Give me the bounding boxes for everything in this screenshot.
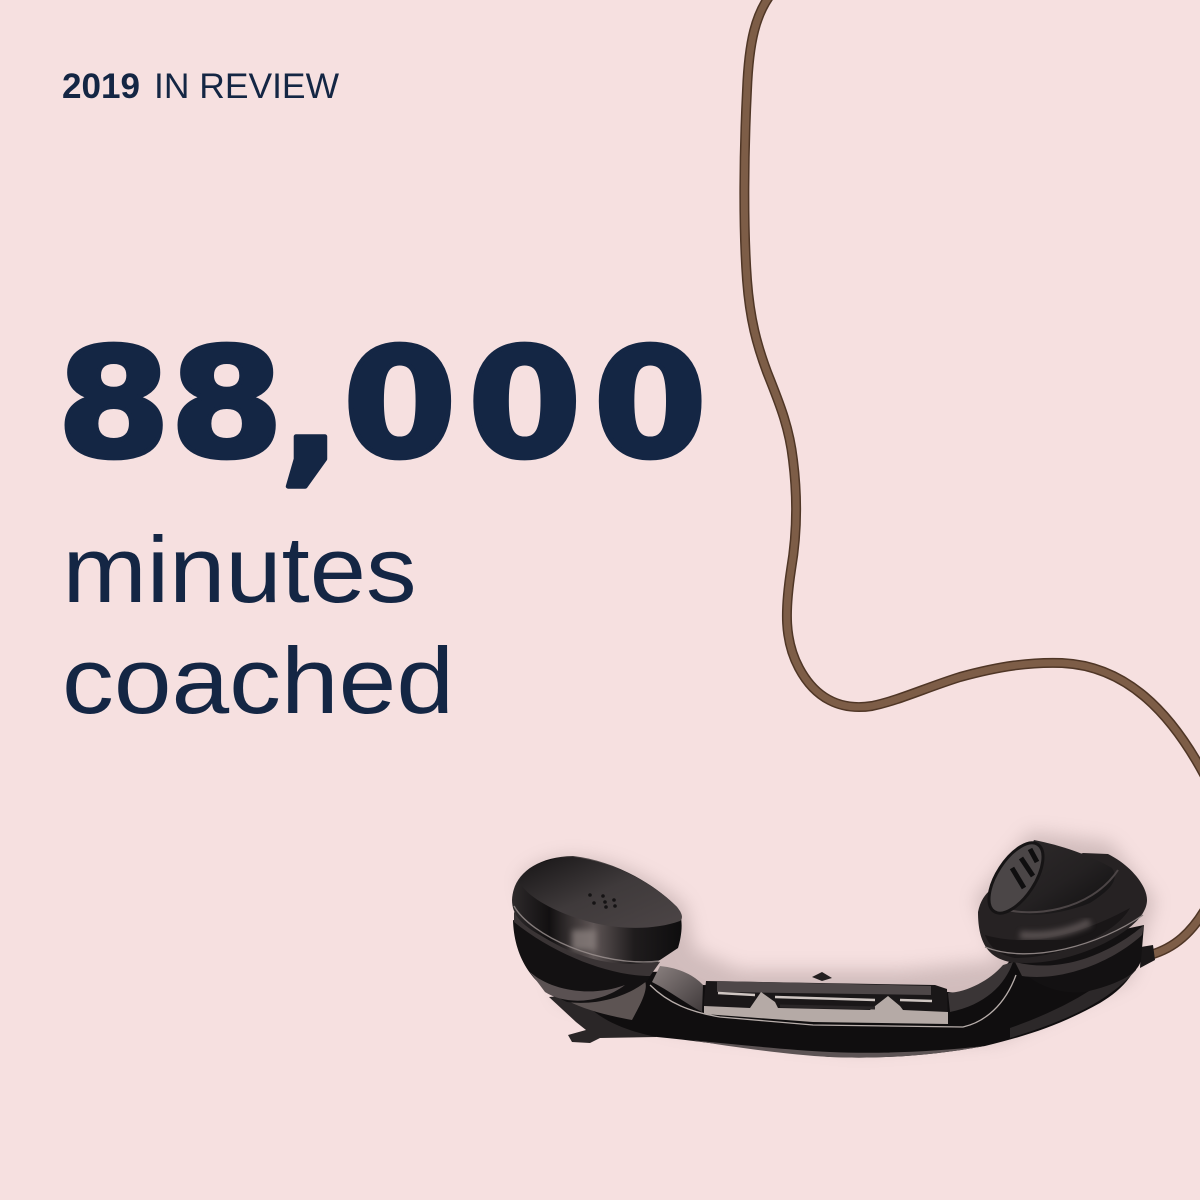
heading: 2019 in review: 2019 xyxy=(62,67,140,106)
earpiece cap xyxy=(512,856,682,964)
handle lower edge fade xyxy=(690,1040,985,1058)
caption: minutes coached xyxy=(62,517,454,733)
big number: 88,000: 88,000 xyxy=(57,317,707,502)
handset hook clip xyxy=(549,996,657,1043)
caption: minutes coached: minutes xyxy=(62,517,416,622)
earpiece lower cup xyxy=(513,920,662,1003)
mouthpiece housing xyxy=(978,853,1147,963)
handle highlight line xyxy=(650,975,1016,1027)
earpiece top face xyxy=(519,857,682,928)
telephone cord xyxy=(744,0,1200,778)
handle body xyxy=(568,945,1140,1058)
grey left shoulder xyxy=(568,979,646,1020)
rear cord stub xyxy=(1140,908,1200,968)
switch plate top pip xyxy=(812,972,832,981)
caption: minutes coached: coached xyxy=(62,628,454,733)
telephone handset xyxy=(512,832,1200,1058)
mouthpiece opening xyxy=(978,834,1054,922)
handle switch plate xyxy=(704,972,948,1024)
earpiece xyxy=(512,856,682,1003)
heading: 2019 in review xyxy=(62,67,339,106)
right neck xyxy=(948,962,1013,1012)
soft shadow xyxy=(520,832,1155,1050)
mouthpiece lower cup xyxy=(1016,925,1144,993)
mouthpiece cone xyxy=(1000,840,1115,915)
earpiece holes xyxy=(588,893,617,909)
mouthpiece xyxy=(978,834,1147,993)
earpiece highlight xyxy=(572,930,596,950)
heading: 2019 in review: IN REVIEW xyxy=(154,67,339,106)
